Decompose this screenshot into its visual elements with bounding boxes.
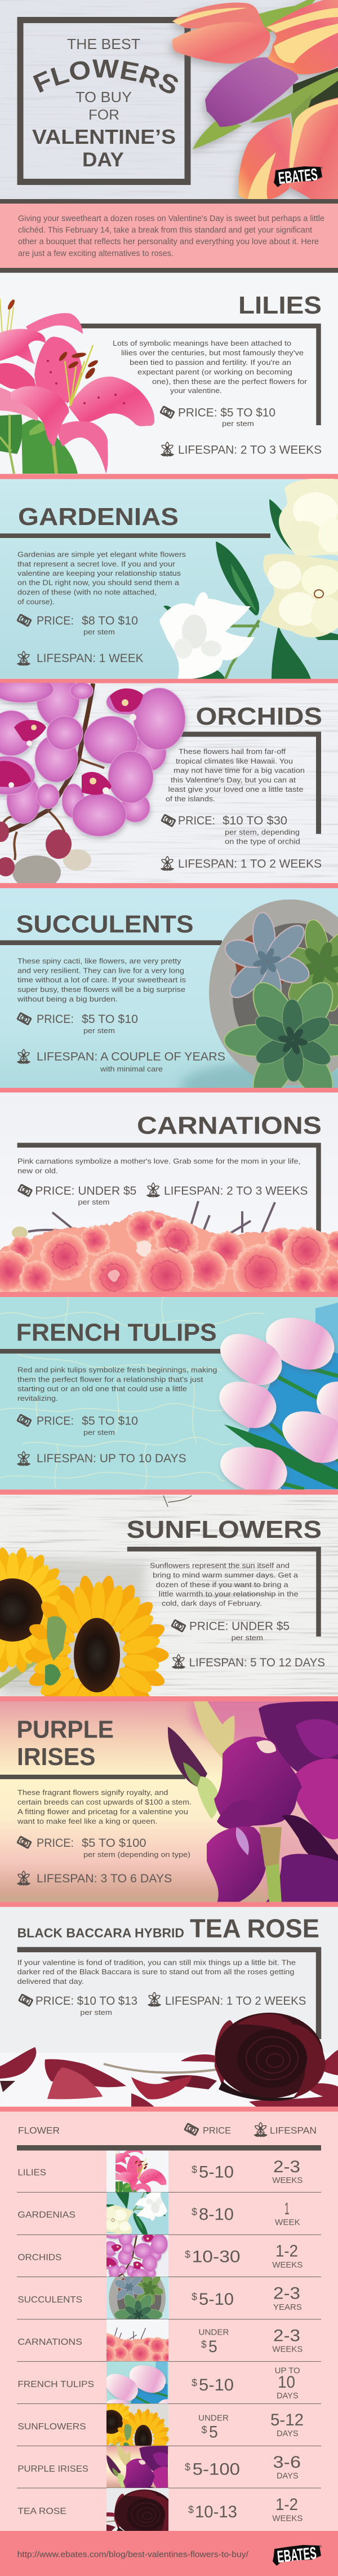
description: and very resilient. They can live for a very long bbox=[17, 967, 184, 975]
heading: PURPLE bbox=[17, 1716, 114, 1744]
panel: intro text: other a bouquet that reflects her personality and everything you love about it. Here bbox=[18, 237, 319, 246]
description: darker red of the Black Baccara is sure to stand out from all the roses getting bbox=[17, 1968, 294, 1976]
description: this Valentine's Day, but you can at bbox=[171, 775, 296, 784]
logo: Ebates bbox=[274, 165, 323, 188]
description: want to make feel like a king or queen. bbox=[17, 1817, 157, 1825]
row: orchids: ORCHIDS bbox=[17, 2253, 61, 2262]
row: lilies: LILIES bbox=[17, 2168, 46, 2178]
lifespan: LIFESPAN: 1 WEEK bbox=[37, 652, 143, 665]
description: of course). bbox=[17, 597, 55, 606]
row: carnations bbox=[17, 2319, 303, 2366]
table header: FLOWER bbox=[18, 2125, 60, 2136]
panel: sunflowers bbox=[0, 1494, 338, 1696]
row: orchids: $ bbox=[185, 2249, 190, 2260]
heading: CARNATIONS bbox=[137, 1111, 322, 1139]
description: super busy, these flowers will be a big surprise bbox=[17, 985, 185, 994]
row: gardenias: WEEK bbox=[275, 2217, 300, 2227]
row: purple irises: $ bbox=[185, 2462, 190, 2473]
price bbox=[161, 406, 275, 427]
row: purple irises: 5-100 bbox=[193, 2460, 240, 2479]
row: succulents bbox=[18, 2277, 302, 2319]
panel: carnations bbox=[0, 1092, 338, 1304]
row: purple irises: 3-6 bbox=[273, 2453, 301, 2472]
row: sunflowers: UNDER bbox=[198, 2414, 229, 2423]
title text: FOR bbox=[88, 107, 119, 123]
row: purple irises: DAYS bbox=[277, 2471, 299, 2481]
image: sunflowers bbox=[0, 1543, 172, 1739]
description: been tied to passion and fertility. If you're an bbox=[130, 358, 291, 367]
description: A fitting flower and pricetag for a valentine you bbox=[17, 1807, 188, 1816]
row: orchids bbox=[18, 2235, 303, 2277]
panel: lilies bbox=[0, 273, 338, 474]
row: sunflowers: $ bbox=[202, 2424, 207, 2436]
description: certain breeds can cost upwards of $100 a stem. bbox=[17, 1798, 192, 1806]
logo: Ebates bbox=[273, 2544, 322, 2566]
lifespan: LIFESPAN: 3 TO 6 DAYS bbox=[37, 1872, 172, 1885]
price: on the type of orchid bbox=[225, 837, 300, 846]
description bbox=[17, 1958, 296, 1986]
lifespan bbox=[17, 1049, 225, 1073]
description: Lots of symbolic meanings have been attached to bbox=[113, 339, 291, 347]
row: lilies: $ bbox=[192, 2164, 197, 2176]
price bbox=[19, 1995, 137, 2017]
title text: DAY bbox=[82, 149, 124, 171]
image: carnations bbox=[0, 1201, 338, 1292]
row: french tulips: 10 bbox=[278, 2373, 295, 2392]
description bbox=[17, 1788, 192, 1825]
description: expectant parent (or working on becoming bbox=[137, 368, 292, 376]
panel: orchids bbox=[0, 672, 338, 889]
heading: SUNFLOWERS bbox=[127, 1516, 322, 1543]
image: tulips bbox=[172, 0, 338, 199]
price: per stem bbox=[83, 1428, 115, 1436]
panel: intro text bbox=[0, 204, 338, 268]
description: Pink carnations symbolize a mother's love. Grab some for the mom in your life, bbox=[17, 1157, 301, 1166]
row: tea rose bbox=[18, 2488, 303, 2531]
description bbox=[17, 957, 186, 1003]
description: that represent a secret love. If you and your bbox=[17, 559, 176, 568]
description: little warmth to your relationship in the bbox=[159, 1590, 299, 1598]
row: carnations: WEEKS bbox=[272, 2345, 303, 2354]
price: $10 TO $30 bbox=[223, 814, 287, 827]
table header bbox=[18, 2123, 317, 2137]
row: french tulips bbox=[18, 2362, 300, 2403]
row: french tulips: FRENCH TULIPS bbox=[17, 2380, 94, 2389]
row: gardenias bbox=[18, 2193, 300, 2234]
row: succulents: $ bbox=[192, 2291, 197, 2302]
description: These fragrant flowers signify royalty, and bbox=[17, 1788, 168, 1797]
lifespan: LIFESPAN: 2 TO 3 WEEKS bbox=[178, 443, 322, 457]
row: carnations: $ bbox=[201, 2339, 207, 2350]
price: PRICE: bbox=[37, 1837, 74, 1850]
panel: footer bbox=[0, 2531, 338, 2576]
row: tea rose: 10-13 bbox=[195, 2503, 237, 2521]
lifespan: LIFESPAN: 1 TO 2 WEEKS bbox=[165, 1995, 306, 2008]
row: tea rose: $ bbox=[188, 2504, 194, 2515]
description: If your valentine is fond of tradition, you can still mix things up a little bit. The bbox=[17, 1958, 296, 1966]
description: one), then these are the perfect flowers for bbox=[152, 377, 308, 386]
price: per stem bbox=[78, 1198, 109, 1206]
heading: IRISES bbox=[17, 1743, 96, 1771]
row: tea rose: WEEKS bbox=[272, 2514, 303, 2524]
price bbox=[17, 1414, 138, 1436]
description: dozen of these (with no note attached, bbox=[17, 588, 157, 596]
panel: intro text: are just a few exciting alternatives to roses. bbox=[18, 249, 174, 258]
price: PRICE: UNDER $5 bbox=[189, 1620, 290, 1633]
price: per stem bbox=[80, 2008, 112, 2017]
lifespan: with minimal care bbox=[100, 1065, 163, 1073]
description bbox=[150, 1561, 299, 1607]
row: french tulips: $ bbox=[192, 2377, 197, 2388]
row: carnations: 5 bbox=[208, 2337, 217, 2356]
row: lilies: 5-10 bbox=[199, 2163, 234, 2181]
price: PRICE: bbox=[37, 1414, 74, 1428]
price bbox=[17, 1837, 190, 1859]
description: of the islands. bbox=[166, 795, 215, 803]
price: $5 TO $10 bbox=[82, 1013, 138, 1026]
price: PRICE: $10 TO $13 bbox=[35, 1995, 137, 2008]
heading: ORCHIDS bbox=[196, 703, 322, 730]
row: gardenias: 1 bbox=[284, 2199, 290, 2218]
description: Red and pink tulips symbolize fresh beginnings, making bbox=[17, 1365, 217, 1374]
row: sunflowers: 5 bbox=[209, 2423, 218, 2442]
price: $5 TO $10 bbox=[82, 1414, 138, 1428]
row: orchids: 10-30 bbox=[192, 2248, 241, 2266]
image: iris bbox=[168, 1701, 338, 1903]
title text: VALENTINE’S bbox=[32, 125, 176, 148]
row: carnations: 2-3 bbox=[273, 2327, 300, 2345]
table header: PRICE bbox=[203, 2125, 231, 2136]
price: PRICE: $5 TO $10 bbox=[178, 406, 275, 420]
row: succulents: SUCCULENTS bbox=[17, 2295, 82, 2305]
row: succulents: 5-10 bbox=[199, 2290, 234, 2309]
description: Gardenias are simple yet elegant white flowers bbox=[17, 550, 186, 558]
lifespan: LIFESPAN: UP TO 10 DAYS bbox=[37, 1452, 186, 1465]
panel: succulents bbox=[0, 888, 338, 1111]
title text bbox=[32, 36, 178, 171]
description: on the DL right now, you should send them a bbox=[17, 578, 180, 586]
lifespan: LIFESPAN: A COUPLE OF YEARS bbox=[37, 1050, 225, 1063]
panel: intro text: clichéd. This February 14, take a break from this standard and get your significant bbox=[18, 226, 313, 235]
description: tropical climates like Hawaii. You bbox=[176, 757, 293, 765]
row: succulents: YEARS bbox=[273, 2302, 302, 2312]
description: bring to mind warm summer days. Get a bbox=[153, 1571, 299, 1579]
row: orchids: WEEKS bbox=[272, 2260, 303, 2270]
price bbox=[18, 1184, 136, 1206]
row: succulents: 2-3 bbox=[273, 2284, 300, 2303]
divider band bbox=[0, 199, 338, 204]
heading: FRENCH TULIPS bbox=[16, 1319, 217, 1347]
row: lilies: 2-3 bbox=[273, 2158, 300, 2176]
lifespan: LIFESPAN: 2 TO 3 WEEKS bbox=[164, 1184, 308, 1197]
source url: http://www.ebates.com/blog/best-valentines-flowers-to-buy/ bbox=[17, 2550, 249, 2560]
description bbox=[17, 1365, 217, 1402]
price bbox=[17, 615, 138, 636]
image: gardenia bbox=[159, 478, 338, 679]
price: per stem bbox=[232, 1634, 263, 1642]
row: tea rose: 1-2 bbox=[275, 2495, 298, 2514]
row: sunflowers: 5-12 bbox=[270, 2411, 304, 2429]
panel: gardenias bbox=[0, 478, 338, 679]
price: per stem bbox=[83, 1026, 115, 1035]
heading bbox=[17, 1716, 114, 1771]
description: without being a big burden. bbox=[17, 995, 118, 1003]
image: orchid bbox=[0, 672, 185, 889]
description: dozen of these if you want to bring a bbox=[156, 1580, 289, 1589]
description: starting out or an old one that could use a little bbox=[17, 1384, 187, 1393]
lifespan: LIFESPAN: 5 TO 12 DAYS bbox=[189, 1656, 325, 1669]
description: delivered that day. bbox=[17, 1977, 84, 1986]
title text: FLOWERS bbox=[33, 60, 178, 94]
title text: TO BUY bbox=[75, 89, 132, 105]
description: them the perfect flower for a relationship that's just bbox=[17, 1375, 203, 1383]
price: PRICE: UNDER $5 bbox=[35, 1184, 136, 1197]
table header: LIFESPAN bbox=[270, 2125, 317, 2136]
heading: LILIES bbox=[238, 292, 322, 319]
price: per stem bbox=[83, 628, 115, 636]
panel: hero header bbox=[0, 0, 338, 199]
price: $5 TO $100 bbox=[82, 1837, 146, 1850]
row: sunflowers: DAYS bbox=[277, 2429, 299, 2438]
description bbox=[166, 747, 305, 803]
heading: TEA ROSE bbox=[190, 1913, 319, 1943]
row: french tulips: DAYS bbox=[277, 2391, 299, 2401]
row: gardenias: $ bbox=[192, 2207, 197, 2218]
description bbox=[17, 1157, 301, 1175]
panel: french tulips bbox=[0, 1297, 338, 1499]
lifespan: LIFESPAN: 1 TO 2 WEEKS bbox=[178, 857, 322, 870]
price: PRICE: bbox=[37, 615, 74, 628]
title text: THE BEST bbox=[67, 36, 140, 52]
panel: intro text: Giving your sweetheart a dozen roses on Valentine's Day is sweet but perhaps a little bbox=[18, 214, 324, 223]
heading bbox=[17, 1913, 319, 1943]
row: purple irises bbox=[18, 2446, 300, 2488]
description: may not have time for a big vacation bbox=[174, 766, 305, 774]
description: new or old. bbox=[17, 1167, 58, 1175]
description: lilies over the centuries, but most famously they've bbox=[121, 349, 304, 357]
description: Sunflowers represent the sun itself and bbox=[150, 1561, 290, 1570]
description: These spiny cacti, like flowers, are very pretty bbox=[17, 957, 181, 965]
description: valentine are keeping your relationship status bbox=[17, 569, 181, 577]
heading: GARDENIAS bbox=[18, 503, 179, 531]
panel: tea rose bbox=[0, 1907, 338, 2107]
price bbox=[17, 1013, 138, 1035]
image: rose and petals bbox=[0, 2013, 338, 2107]
price: per stem, depending bbox=[225, 828, 300, 836]
description: time without a lot of care. If your sweetheart is bbox=[17, 976, 186, 984]
price: per stem (depending on type) bbox=[83, 1850, 190, 1859]
price bbox=[172, 1620, 290, 1642]
row: orchids: 1-2 bbox=[275, 2242, 298, 2260]
image: tulips bbox=[219, 1303, 338, 1490]
price: $8 TO $10 bbox=[82, 615, 138, 628]
row: purple irises: PURPLE IRISES bbox=[17, 2464, 88, 2474]
row: carnations: CARNATIONS bbox=[17, 2337, 82, 2347]
price: PRICE: bbox=[178, 814, 215, 827]
row: carnations: UNDER bbox=[198, 2328, 229, 2337]
description bbox=[17, 550, 186, 606]
description: revitalizing. bbox=[17, 1394, 58, 1402]
price bbox=[162, 814, 300, 846]
heading: BLACK BACCARA HYBRID bbox=[17, 1925, 184, 1940]
title frame bbox=[20, 20, 188, 182]
description bbox=[113, 339, 308, 395]
description: These flowers hail from far-off bbox=[179, 747, 286, 756]
description: your valentine. bbox=[170, 386, 222, 395]
row: french tulips: UP TO bbox=[275, 2366, 300, 2375]
description: least give your loved one a little taste bbox=[168, 785, 303, 793]
price: PRICE: bbox=[37, 1013, 74, 1026]
row: sunflowers: SUNFLOWERS bbox=[17, 2422, 86, 2432]
price: per stem bbox=[222, 420, 254, 427]
row: lilies: WEEKS bbox=[272, 2176, 303, 2185]
description: cold, dark days of February. bbox=[162, 1599, 262, 1607]
row: tea rose: TEA ROSE bbox=[17, 2507, 66, 2516]
row: french tulips: 5-10 bbox=[199, 2376, 234, 2394]
image: lily bbox=[0, 298, 154, 474]
panel: comparison table bbox=[0, 2111, 338, 2541]
row: gardenias: GARDENIAS bbox=[17, 2211, 75, 2220]
row: gardenias: 8-10 bbox=[199, 2205, 234, 2224]
image: succulents bbox=[208, 899, 338, 1105]
heading: SUCCULENTS bbox=[16, 911, 194, 938]
row: sunflowers bbox=[18, 2403, 303, 2446]
panel: purple irises bbox=[0, 1701, 338, 1902]
row: lilies bbox=[18, 2151, 303, 2192]
